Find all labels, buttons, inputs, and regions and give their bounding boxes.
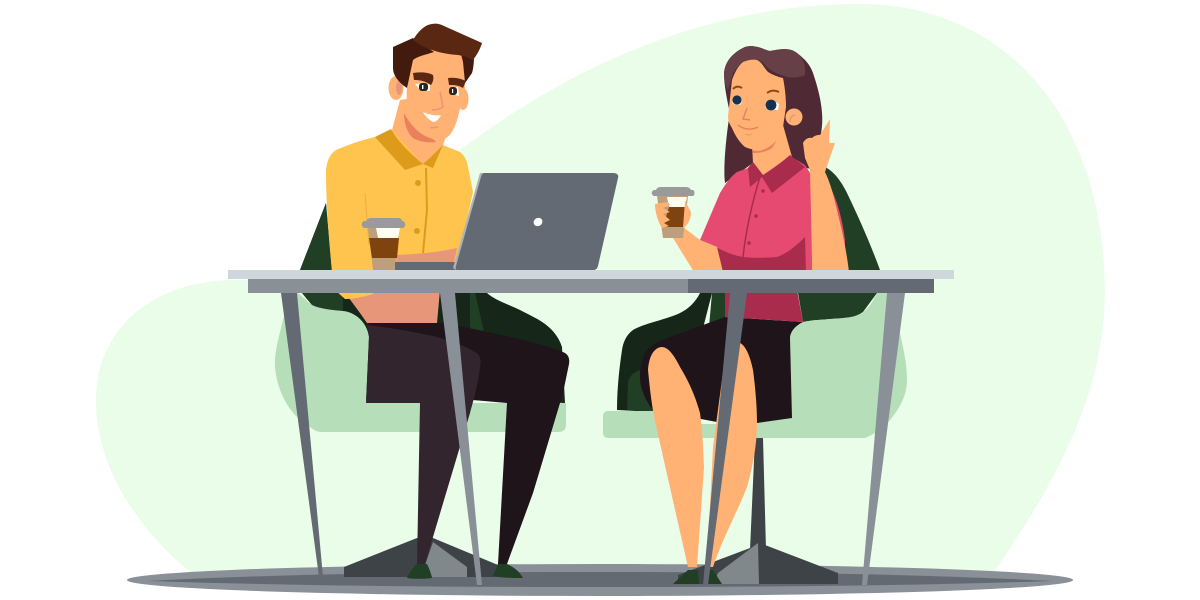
man's coffee cup	[362, 218, 405, 270]
man: nose	[432, 92, 443, 110]
man: neck	[392, 90, 463, 164]
man: left ear	[388, 76, 404, 100]
woman: coffee cup	[652, 187, 694, 238]
man's chair	[275, 203, 566, 432]
man: eyebrows	[413, 72, 466, 88]
woman: neck	[752, 125, 792, 176]
woman: shirt band	[713, 237, 806, 272]
woman's base	[678, 438, 838, 584]
man: eyes	[415, 83, 459, 96]
woman: shirt	[700, 156, 845, 272]
woman: hair back	[724, 46, 825, 183]
woman: nose and mouth	[738, 108, 758, 135]
man: arm	[395, 248, 457, 272]
woman	[640, 46, 849, 584]
woman: fingers	[655, 202, 670, 228]
woman: legs	[648, 343, 757, 567]
woman: under-table shirt	[725, 290, 803, 322]
woman: skirt	[640, 317, 803, 423]
man: back leg	[367, 323, 569, 564]
floor ellipse	[127, 564, 1073, 596]
table	[228, 270, 954, 585]
man: smile	[423, 112, 441, 122]
man: hair	[393, 24, 482, 88]
man: front leg	[366, 325, 481, 565]
woman: face	[728, 60, 786, 150]
laptop	[395, 173, 618, 271]
woman's chair	[603, 167, 907, 438]
woman: eyebrows	[733, 87, 779, 93]
man: shoes	[407, 564, 523, 579]
woman: eyes	[732, 95, 779, 110]
man: face	[404, 42, 465, 140]
man	[326, 24, 569, 579]
table legs	[281, 293, 323, 577]
man: lap	[343, 290, 440, 323]
woman: shoes	[673, 570, 722, 584]
table apron	[248, 279, 688, 293]
woman: collar	[748, 155, 805, 193]
man's base	[344, 538, 498, 577]
woman: hair top	[724, 46, 805, 90]
woman: raised arm and hand	[803, 119, 849, 272]
man: jaw shadow	[404, 113, 436, 142]
table top	[228, 270, 954, 279]
man: shirt	[326, 130, 473, 272]
woman: ear	[786, 108, 802, 126]
man: right ear	[458, 88, 468, 110]
man: collar	[375, 129, 443, 170]
woman: left arm	[673, 227, 723, 272]
